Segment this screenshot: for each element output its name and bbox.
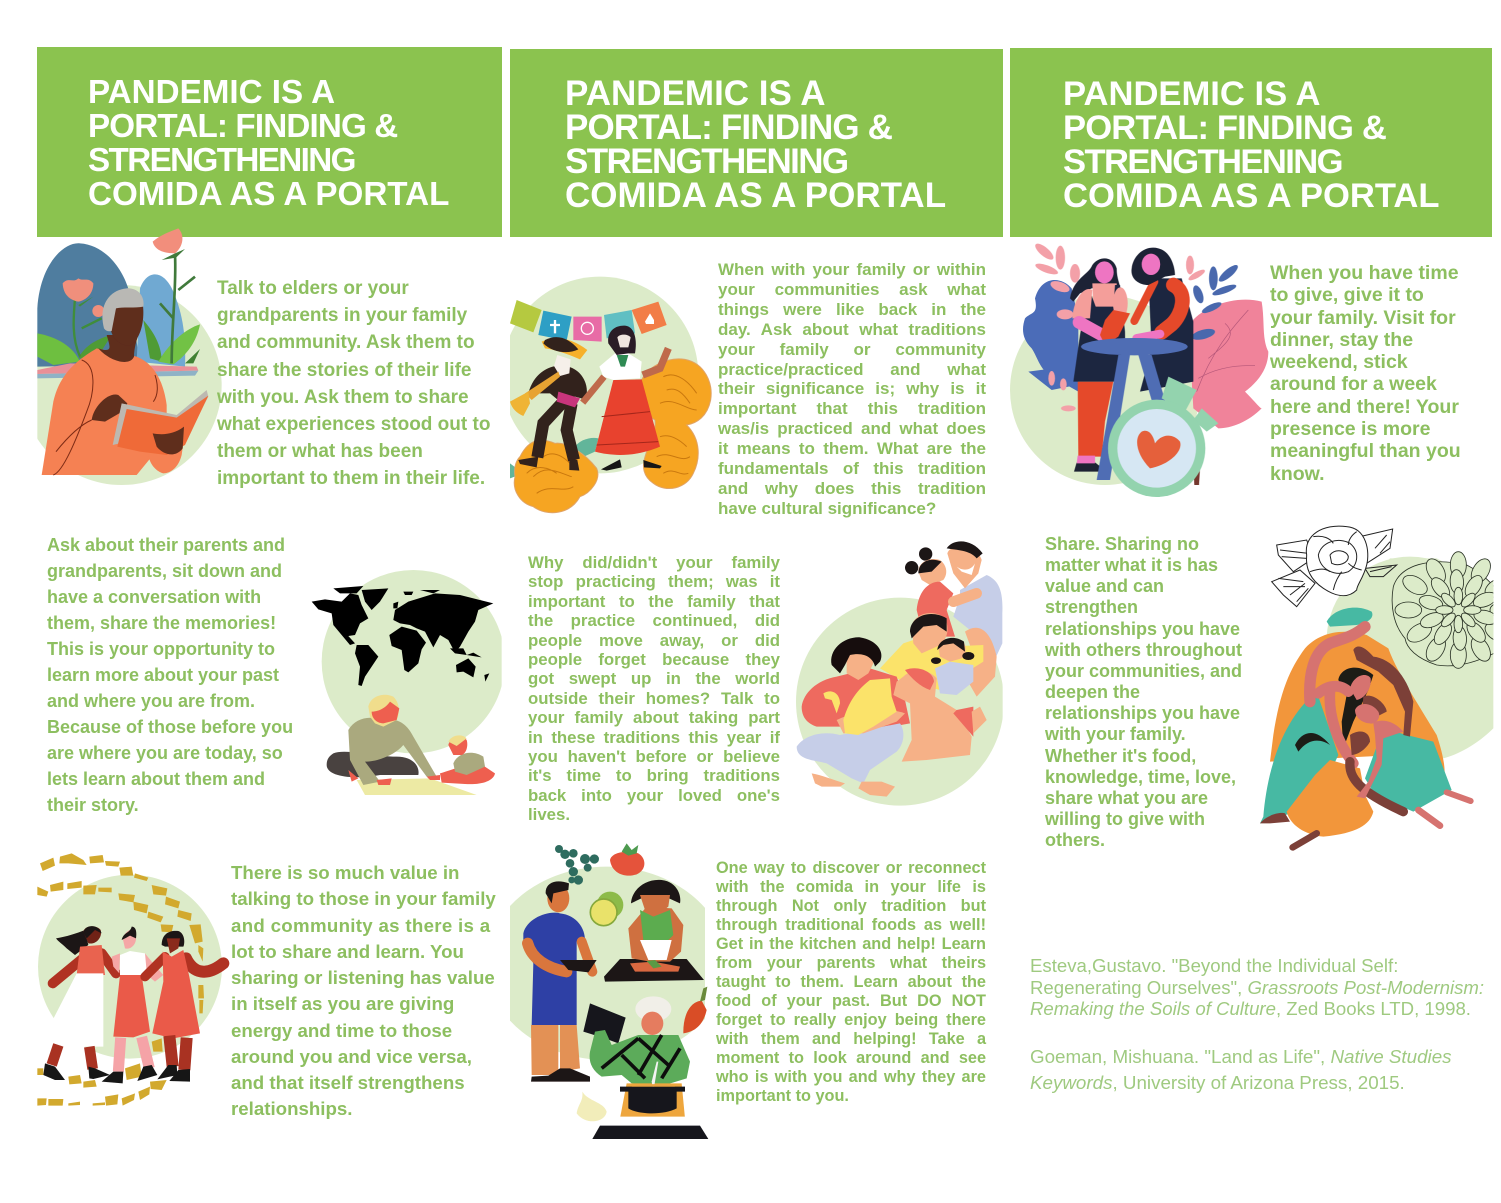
text block: reconnect with comida: who is with you and why they are	[716, 1068, 986, 1086]
woman right	[162, 931, 184, 947]
text block: traditions questions: was/is practiced and what does	[718, 419, 986, 438]
text block: why stop practicing: got swept up in the world	[528, 669, 780, 688]
text block: reconnect with comida: from your parents what theirs	[716, 954, 986, 972]
text block: value in talking: talking to those in your family	[231, 888, 496, 909]
text block: reconnect with comida: important to you.	[716, 1087, 849, 1105]
text block: ask about parents	[47, 535, 293, 815]
reference: Goeman	[1030, 1046, 1452, 1093]
text block: reconnect with comida: Get in the kitchen and help! Learn	[716, 935, 986, 953]
world map	[312, 586, 493, 686]
panel header: column 2	[510, 49, 1003, 237]
text block: talk to elders: grandparents in your family	[217, 305, 467, 326]
text block: sharing: Whether it's food,	[1045, 746, 1196, 766]
text block: value in talking: lot to share and learn. You	[231, 941, 464, 962]
text block: give your time: around for a week	[1270, 373, 1437, 395]
reference: Goeman: Goeman, Mishuana. "Land as Life", Native Studies	[1030, 1046, 1452, 1067]
man with trumpet	[537, 402, 574, 460]
text block: value in talking: relationships.	[231, 1098, 352, 1119]
reference: Esteva: Esteva,Gustavo. "Beyond the Individual Self:	[1030, 955, 1398, 976]
gold brush dashes	[37, 853, 204, 1106]
text block: traditions questions: important that this tradition	[718, 399, 986, 418]
text block: why stop practicing: people move away, or did	[528, 631, 780, 650]
heading: column 1	[88, 74, 449, 213]
text block: reconnect with comida	[716, 859, 986, 1105]
text block: talk to elders: important to them in their life.	[217, 468, 485, 489]
heading: column 3: PANDEMIC IS A	[1063, 75, 1320, 113]
text block: give your time: weekend, stick	[1270, 351, 1408, 373]
text block: why stop practicing: in these traditions this year if	[528, 728, 780, 747]
text block: traditions questions: practice/practiced and what	[718, 360, 986, 379]
text block: why stop practicing: Why did/didn't your family	[528, 553, 780, 572]
illustration: Day of the Dead musician and dancer	[502, 277, 711, 513]
illustrations layer	[37, 228, 1494, 1139]
child	[938, 638, 966, 662]
text block: sharing: Share. Sharing no	[1045, 534, 1199, 554]
text block: traditions questions	[718, 260, 986, 518]
panel header: column 3	[1010, 48, 1492, 237]
text block: give your time: dinner, stay the	[1270, 329, 1413, 351]
text block: traditions questions: it means to them. What are the	[718, 439, 986, 458]
seated child	[440, 763, 495, 784]
text block: talk to elders: share the stories of their life	[217, 360, 471, 381]
text block: traditions questions: their significance is; why is it	[718, 379, 986, 398]
herbs	[555, 845, 599, 885]
text block: give your time	[1270, 262, 1461, 485]
text block: talk to elders: what experiences stood out to	[217, 414, 490, 435]
text block: talk to elders: Talk to elders or your	[217, 278, 409, 299]
heading: column 3	[1063, 75, 1440, 215]
text block: why stop practicing: the practice continued, did	[528, 611, 780, 630]
text block: talk to elders	[217, 278, 490, 489]
grandmother	[635, 996, 671, 1022]
illustration: three women with arms linked	[37, 853, 223, 1106]
text block: traditions questions: have cultural significance?	[718, 499, 936, 518]
illustration: world map with parent and child	[312, 570, 505, 795]
heading: column 3: COMIDA AS A PORTAL	[1063, 177, 1440, 215]
mother	[802, 668, 910, 730]
garlic	[577, 1092, 607, 1121]
text block: ask about parents: Because of those before you	[47, 717, 293, 737]
right woman	[1140, 278, 1193, 392]
text block: reconnect with comida: through Not only tradition but	[716, 897, 986, 915]
text block: why stop practicing: it's time to bring traditions	[528, 766, 780, 785]
text block: reconnect with comida: with the comida in your life is	[716, 878, 986, 896]
illustration: elder reading a book	[22, 228, 222, 485]
table	[1100, 310, 1130, 345]
tomato	[610, 852, 644, 876]
text block: ask about parents: them, share the memories!	[47, 613, 276, 633]
woman left	[56, 930, 88, 955]
text block: ask about parents: and where you are from.	[47, 691, 255, 711]
text block: value in talking: sharing or listening has value	[231, 967, 495, 988]
text block: sharing: value and can	[1045, 576, 1164, 596]
text block: why stop practicing: outside their homes? Talk to	[528, 689, 780, 708]
magnifier heart icon	[1108, 377, 1218, 497]
seated adult	[327, 752, 419, 777]
heading: column 1: STRENGTHENING	[88, 142, 355, 179]
text block: sharing: relationships you have	[1045, 703, 1240, 723]
text block: sharing	[1045, 534, 1242, 850]
text block: traditions questions: and why does this tradition	[718, 479, 986, 498]
reference: Goeman: Keywords, University of Arizona Press, 2015.	[1030, 1072, 1405, 1093]
text block: sharing: knowledge, time, love,	[1045, 767, 1236, 787]
text block: talk to elders: and community. Ask them to	[217, 332, 475, 353]
text block: why stop practicing: people forget because they	[528, 650, 780, 669]
illustration: family with pets	[796, 541, 1004, 806]
woman center	[123, 930, 136, 949]
text block: why stop practicing: lives.	[528, 805, 570, 824]
text block: why stop practicing: stop practicing them; was it	[528, 572, 780, 591]
cat	[843, 678, 897, 735]
marigolds	[514, 359, 711, 513]
text block: traditions questions: day. Ask about what traditions	[718, 320, 986, 339]
outline chrysanthemum	[1392, 552, 1501, 668]
heading: column 1: PANDEMIC IS A	[88, 74, 335, 111]
text block: reconnect with comida: with them and helping! Take a	[716, 1030, 986, 1048]
text block: sharing: with your family.	[1045, 724, 1186, 744]
text block: traditions questions: things were like back in the	[718, 300, 986, 319]
text block: why stop practicing: important to the family that	[528, 592, 780, 611]
text block: value in talking: in itself as you are giving	[231, 993, 454, 1014]
text block: sharing: matter what it is has	[1045, 555, 1218, 575]
text block: ask about parents: This is your opportunity to	[47, 639, 275, 659]
text block: sharing: your communities, and	[1045, 661, 1242, 681]
daughter	[919, 547, 932, 561]
lime	[597, 892, 623, 918]
text block: traditions questions: your communities ask what	[718, 280, 986, 299]
text block: why stop practicing: you haven't before or believe	[528, 747, 780, 766]
text block: why stop practicing: your family about taking part	[528, 708, 780, 727]
text block: give your time: your family. Visit for	[1270, 307, 1456, 329]
chili	[683, 1001, 707, 1033]
heading: column 3: STRENGTHENING	[1063, 143, 1342, 181]
reference: Esteva	[1030, 955, 1484, 1019]
text block: reconnect with comida: food of your past. But DO NOT	[716, 992, 986, 1010]
heading: column 2: PORTAL: FINDING &	[565, 108, 892, 147]
father	[953, 575, 1002, 670]
text block: give your time: here and there! Your	[1270, 396, 1459, 418]
text block: ask about parents: Ask about their parents and	[47, 535, 285, 555]
text block: traditions questions: When with your family or within	[718, 260, 986, 279]
text block: sharing: relationships you have	[1045, 619, 1240, 639]
text block: value in talking: around you and vice versa,	[231, 1046, 472, 1067]
dancer	[595, 379, 660, 455]
text block: why stop practicing: back into your loved one's	[528, 786, 780, 805]
text block: value in talking: and that itself strengthens	[231, 1072, 465, 1093]
text block: traditions questions: fundamentals of this tradition	[718, 459, 986, 478]
figures	[1270, 632, 1445, 782]
text block: reconnect with comida: moment to look around and see	[716, 1049, 986, 1067]
text block: reconnect with comida: through traditional foods as well!	[716, 916, 986, 934]
text block: ask about parents: are where you are today, so	[47, 743, 283, 763]
heading: column 2: STRENGTHENING	[565, 142, 848, 181]
text block: sharing: with others throughout	[1045, 640, 1242, 660]
text block: sharing: willing to give with	[1045, 809, 1205, 829]
text block: why stop practicing	[528, 553, 780, 824]
text block: sharing: share what you are	[1045, 788, 1208, 808]
text block: give your time: meaningful than you	[1270, 440, 1461, 462]
reference: Esteva: Regenerating Ourselves", Grassroots Post-Modernism:	[1030, 976, 1484, 998]
text block: give your time: know.	[1270, 463, 1325, 485]
text block: give your time: presence is more	[1270, 418, 1430, 440]
outline peony	[1272, 526, 1397, 607]
left woman	[1078, 382, 1113, 457]
text block: reconnect with comida: forget to really enjoy being there	[716, 1011, 986, 1029]
heading: column 2: COMIDA AS A PORTAL	[565, 176, 946, 215]
text block: sharing: deepen the	[1045, 682, 1140, 702]
text block: ask about parents: have a conversation with	[47, 587, 261, 607]
middle parent	[880, 640, 983, 690]
text block: value in talking: There is so much value in	[231, 862, 459, 883]
text block: traditions questions: your family or community	[718, 340, 986, 359]
panel header: column 1	[37, 47, 502, 237]
text block: reconnect with comida: taught to them. Learn about the	[716, 973, 986, 991]
illustration: two women at table with heart magnifier	[1010, 241, 1268, 497]
man	[547, 884, 569, 912]
text block: ask about parents: their story.	[47, 795, 139, 815]
heading: column 2	[565, 74, 946, 215]
illustration: three embracing women with flowers	[1260, 526, 1501, 847]
text block: reconnect with comida: One way to discover or reconnect	[716, 859, 986, 877]
heading: column 2: PANDEMIC IS A	[565, 74, 826, 113]
text block: value in talking: and community as there is a	[231, 914, 490, 936]
text block: sharing: strengthen	[1045, 597, 1138, 617]
heading: column 1: PORTAL: FINDING &	[88, 108, 397, 145]
text block: ask about parents: grandparents, sit down and	[47, 561, 282, 581]
papel picado banners	[510, 300, 667, 342]
text block: value in talking: energy and time to those	[231, 1020, 452, 1040]
text block: talk to elders: with you. Ask them to share	[217, 387, 469, 408]
text block: talk to elders: them or what has been	[217, 441, 423, 462]
dog	[893, 670, 972, 762]
text block: sharing: others.	[1045, 830, 1105, 850]
illustration: family cooking together	[510, 844, 708, 1139]
heading: column 1: COMIDA AS A PORTAL	[88, 176, 449, 213]
text block: value in talking	[231, 862, 496, 1119]
reference: Esteva: Remaking the Soils of Culture, Zed Books LTD, 1998.	[1030, 998, 1471, 1019]
text block: ask about parents: learn more about your past	[47, 665, 279, 685]
heading: column 3: PORTAL: FINDING &	[1063, 109, 1386, 147]
girl on mat	[604, 959, 704, 982]
text block: give your time: When you have time	[1270, 262, 1459, 284]
text block: ask about parents: lets learn about them and	[47, 769, 265, 789]
text block: give your time: to give, give it to	[1270, 284, 1424, 306]
